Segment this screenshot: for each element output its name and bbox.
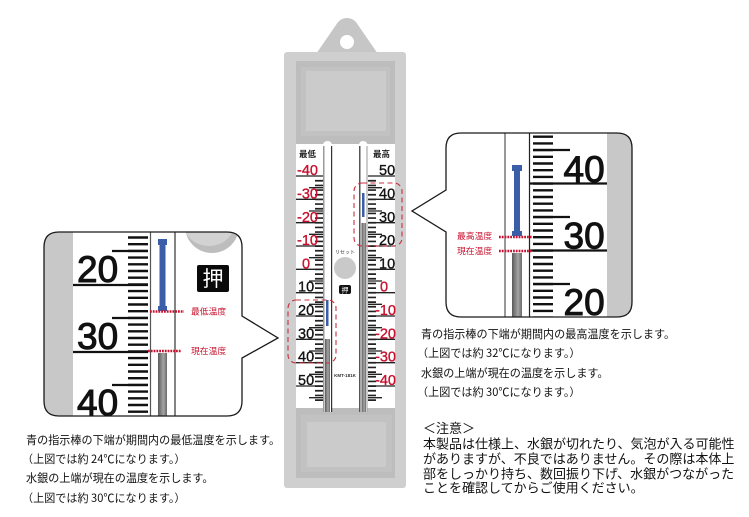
left scale numbers: 50	[298, 373, 314, 389]
gray side band	[44, 232, 73, 416]
top panel	[296, 61, 395, 145]
text: maximum explanation: 青の指示棒の下端が期間内の最高温度を示します。	[421, 326, 675, 342]
dashed highlight: minimum	[288, 300, 336, 363]
left scale numbers: 30	[298, 326, 314, 342]
text: caution note: ことを確認してからご使用ください。	[423, 478, 644, 496]
right scale numbers: -20	[375, 326, 396, 342]
callout: maximum detail	[412, 133, 632, 323]
blue indicator	[512, 165, 522, 236]
text: caution note: 部をしっかり持ち、数回振り下げ、水銀がつながった	[423, 464, 734, 482]
right scale numbers: 40	[379, 186, 395, 202]
mercury column	[158, 353, 167, 416]
scale ticks	[530, 136, 607, 317]
label: current temperature: 現在温度	[457, 244, 492, 257]
hanging hole	[340, 35, 354, 49]
right scale numbers: 0	[380, 280, 388, 296]
callout outline	[412, 133, 632, 317]
text: minimum explanation: 青の指示棒の下端が期間内の最低温度を示します。	[26, 432, 280, 448]
big numbers: 40	[564, 149, 605, 190]
big numbers: 40	[77, 382, 118, 424]
big numbers	[77, 249, 118, 424]
right scale numbers: 30	[379, 210, 395, 226]
thermometer body	[284, 52, 406, 488]
big numbers	[564, 149, 605, 323]
text: maximum explanation: （上図では約 32℃になります。）	[417, 345, 580, 361]
thermometer	[284, 18, 406, 488]
text: minimum explanation: （上図では約 24℃になります。）	[22, 451, 185, 467]
left scale numbers: 0	[302, 256, 310, 272]
tube lines	[150, 232, 152, 416]
right scale numbers	[375, 163, 396, 389]
big numbers: 20	[77, 249, 118, 290]
callout outline	[44, 232, 278, 416]
left scale ticks	[296, 176, 323, 402]
reset button crop	[186, 232, 237, 253]
label: minimum temperature: 最低温度	[191, 304, 226, 318]
text: minimum explanation	[22, 432, 280, 506]
left scale numbers: 10	[298, 280, 314, 296]
dashed highlight: maximum	[354, 183, 402, 246]
hanging tab	[316, 18, 378, 54]
right tube	[359, 141, 368, 412]
big numbers: 30	[77, 316, 118, 357]
right scale numbers: 20	[379, 233, 395, 249]
tube lines	[504, 133, 506, 317]
minimum dotted line	[150, 310, 184, 313]
heading: highest: 最高	[373, 148, 390, 160]
text: caution note: ＜注意＞	[423, 418, 475, 437]
text: minimum explanation: 水銀の上端が現在の温度を示します。	[26, 470, 214, 486]
push icon	[197, 263, 229, 293]
left mercury	[325, 339, 330, 412]
right blue indicator	[362, 193, 364, 217]
model number: KMT-181K	[334, 373, 357, 378]
right scale numbers: -40	[375, 373, 396, 389]
left scale numbers: 20	[298, 303, 314, 319]
text: caution note: 本製品は仕様上、水銀が切れたり、気泡が入る可能性	[423, 434, 734, 452]
right scale numbers: 50	[379, 163, 395, 179]
current dotted line	[148, 350, 181, 352]
left scale numbers: -40	[297, 163, 318, 179]
left blue indicator	[326, 300, 328, 326]
big numbers: 20	[564, 282, 605, 323]
maximum dotted line	[499, 236, 532, 238]
reset label: リセット	[335, 249, 355, 256]
text: maximum explanation: 水銀の上端が現在の温度を示します。	[421, 365, 608, 381]
text: maximum explanation	[417, 326, 675, 400]
scale plate	[296, 144, 395, 408]
left scale numbers: -30	[297, 186, 318, 202]
right scale ticks	[368, 176, 395, 402]
right scale numbers: -10	[375, 303, 396, 319]
text: minimum explanation: （上図では約 30℃になります。）	[22, 490, 185, 506]
heading: lowest: 最低	[299, 148, 317, 160]
scale ticks	[73, 236, 148, 416]
push badge: 押	[342, 286, 348, 296]
callout: minimum detail	[43, 231, 280, 417]
left scale numbers: 40	[298, 350, 314, 366]
callout fill	[412, 133, 632, 317]
big numbers: 30	[564, 216, 605, 256]
push badge	[339, 285, 351, 296]
callout fill	[44, 232, 278, 416]
left scale numbers: -20	[297, 210, 318, 226]
current dotted line	[499, 250, 532, 252]
label: maximum temperature: 最高温度	[457, 229, 492, 242]
bottom panel	[296, 408, 395, 478]
push icon: 押	[202, 263, 224, 293]
left scale numbers: -10	[297, 233, 318, 249]
blue indicator	[158, 239, 167, 311]
text: caution note	[423, 418, 734, 496]
right scale numbers: 10	[379, 256, 395, 272]
text: maximum explanation: （上図では約 30℃になります。）	[417, 384, 580, 400]
left scale numbers	[297, 163, 318, 389]
mercury column	[512, 253, 522, 317]
right scale numbers: -30	[375, 350, 396, 366]
gray side band	[607, 133, 632, 317]
label: current temperature: 現在温度	[191, 344, 226, 357]
text: caution note: がありますが、不良ではありません。その際は本体上	[423, 448, 734, 468]
left tube	[323, 141, 332, 412]
reset button	[334, 257, 356, 279]
right mercury	[362, 223, 366, 412]
